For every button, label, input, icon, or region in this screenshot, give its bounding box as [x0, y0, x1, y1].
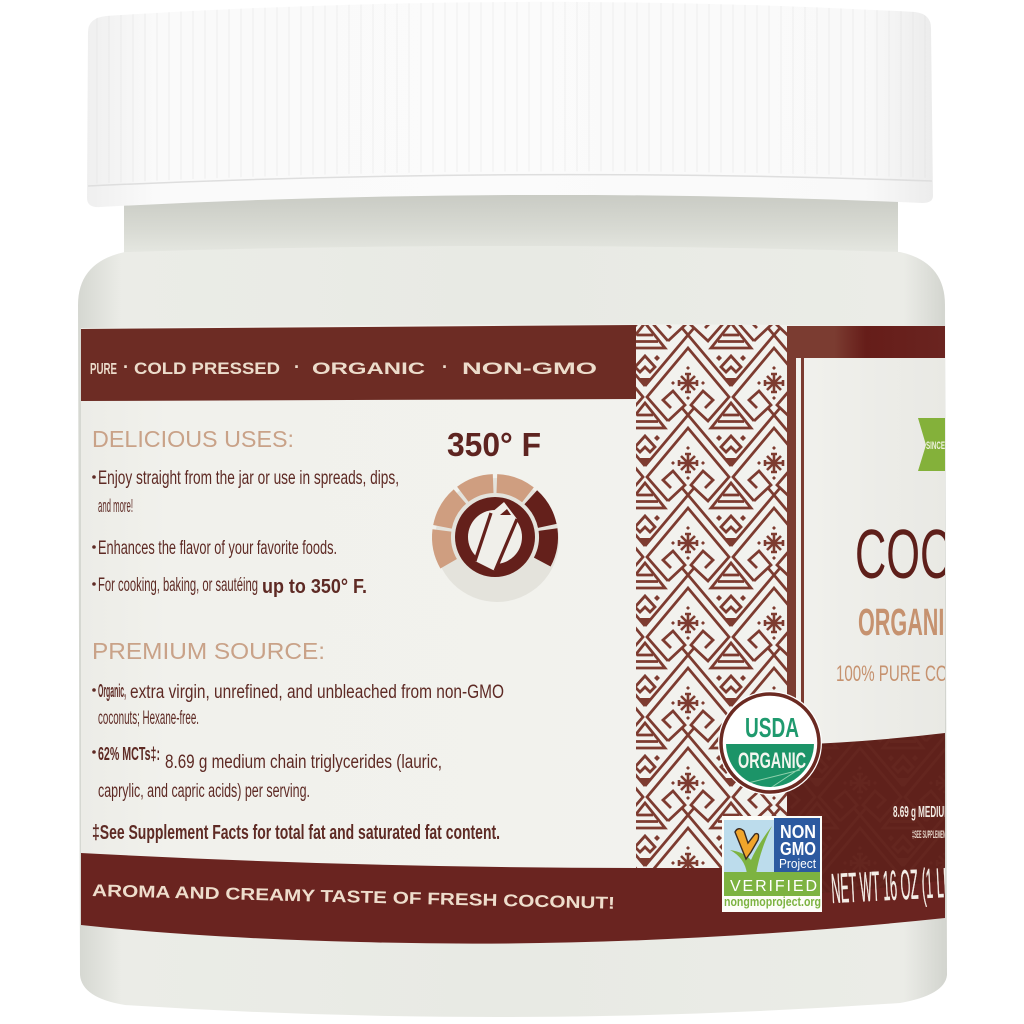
top band with claims	[81, 325, 636, 401]
text block: premium source list: ‡See Supplement Facts for total fat and saturated fat content.	[92, 822, 500, 844]
top band with claims: ·	[123, 357, 129, 377]
panel: front label stripes and top bar	[787, 326, 945, 746]
top band with claims: ORGANIC	[312, 359, 425, 378]
top band with claims: COLD PRESSED	[134, 359, 280, 378]
icon: green since banner	[918, 418, 945, 471]
jar body with coconut oil	[78, 246, 947, 1017]
top band with claims: ·	[442, 357, 448, 377]
lid	[87, 2, 933, 207]
heading: delicious uses: DELICIOUS USES:	[92, 426, 294, 452]
icon: USDA organic seal: USDA	[745, 712, 799, 743]
text block: uses list: Enhances the flavor of your favorite foods.	[98, 538, 337, 559]
panel: front label lower brown block	[787, 733, 945, 895]
icon: Non-GMO Project verified badge: nongmoproject.org	[724, 894, 821, 909]
text block: premium source list	[92, 681, 504, 844]
top band with claims: PURE	[90, 361, 117, 378]
label background	[81, 324, 945, 944]
icon: Non-GMO Project verified badge: VERIFIED	[730, 878, 817, 895]
icon: Non-GMO Project verified badge	[722, 816, 822, 912]
text block: premium source list: extra virgin, unrefined, and unbleached from non-GMO	[130, 682, 504, 703]
icon: Non-GMO Project verified badge: GMO	[780, 839, 816, 859]
text block: premium source list: 8.69 g medium chain triglycerides (lauric,	[165, 752, 442, 773]
icon: Non-GMO Project verified badge: NON	[780, 822, 816, 842]
text block: uses list: Enjoy straight from the jar or use in spreads, dips,	[98, 468, 399, 489]
bottom band	[81, 853, 945, 944]
heading: 350 F: 350° F	[447, 426, 541, 463]
text block: premium source list: caprylic, and capric acids) per serving.	[98, 781, 310, 802]
heading: premium source: PREMIUM SOURCE:	[92, 638, 325, 664]
top band with claims: ·	[294, 357, 300, 377]
banner text: SINCE	[926, 440, 945, 452]
panel: decorative tribal pattern	[636, 325, 787, 868]
text block: premium source list: 62% MCTs‡:	[98, 744, 160, 764]
text block: uses list: For cooking, baking, or sautéing	[98, 575, 258, 596]
top band with claims: NON-GMO	[462, 359, 597, 378]
product descriptor: 100% PURE COL	[836, 661, 956, 686]
text block: uses list: and more!	[98, 496, 133, 516]
text: ‡SEE SUPPLEMENT	[912, 829, 948, 841]
icon: temperature dial	[432, 474, 559, 602]
text block: premium source list: coconuts; Hexane-free.	[98, 708, 199, 729]
text block: uses list	[92, 468, 399, 598]
text block: uses list: up to 350° F.	[262, 576, 367, 598]
icon: Non-GMO Project verified badge: Project	[779, 856, 816, 871]
icon: USDA organic seal	[718, 691, 822, 795]
jar neck	[124, 195, 898, 255]
icon: USDA organic seal: ORGANIC	[738, 748, 806, 773]
MCT callout: 8.69 g MEDIUM	[893, 804, 951, 821]
text block: premium source list: Organic,	[98, 681, 126, 701]
bottom band slogan: AROMA AND CREAMY TASTE OF FRESH COCONUT!	[92, 881, 615, 913]
